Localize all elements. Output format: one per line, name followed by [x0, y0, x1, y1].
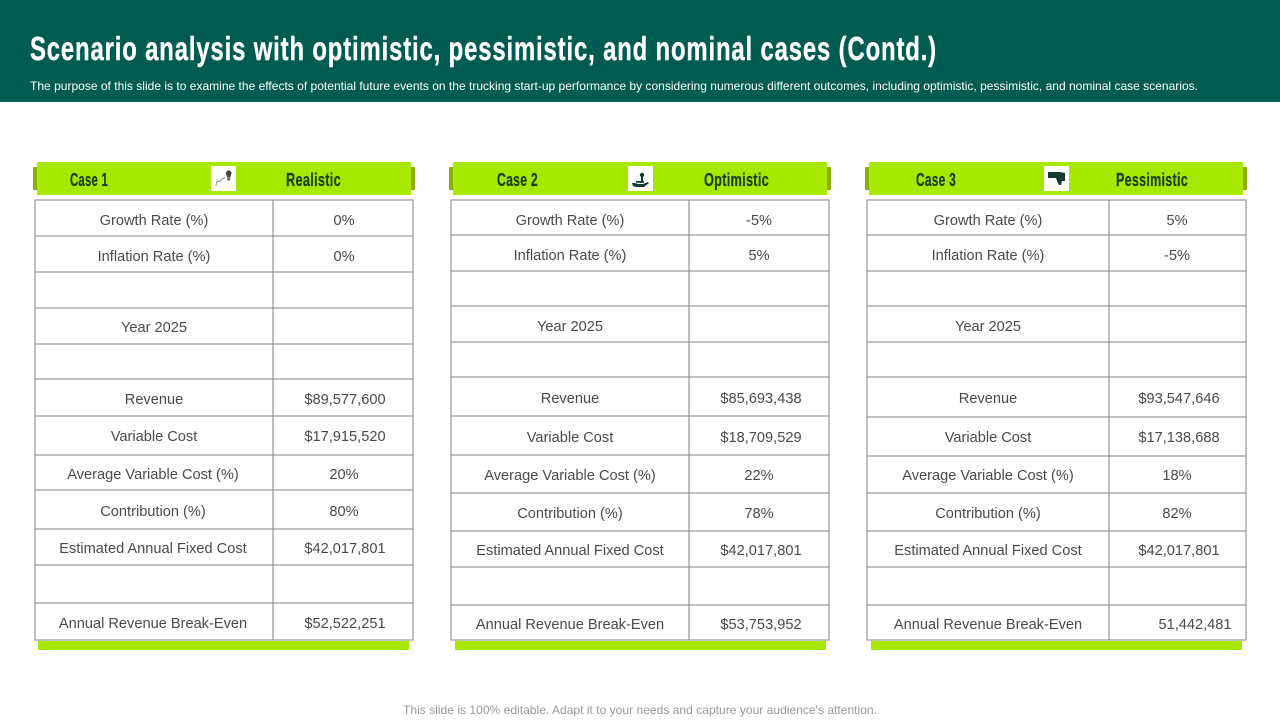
row: revenue: $89,577,600	[304, 392, 386, 408]
row: year: Year 2025	[121, 320, 187, 336]
bottom accent bar	[455, 641, 826, 650]
row: break-even	[894, 617, 1232, 633]
row: average variable cost: 18%	[1162, 468, 1192, 484]
row: revenue: Revenue	[959, 391, 1017, 407]
row: fixed cost	[894, 543, 1220, 559]
row: variable cost: $17,915,520	[304, 429, 386, 445]
row: fixed cost: $42,017,801	[1138, 543, 1220, 559]
row: contribution: 78%	[744, 506, 774, 522]
title: Scenario analysis with optimistic, pessimistic, and nominal cases (Contd.)	[30, 30, 937, 67]
row: contribution: 82%	[1162, 506, 1192, 522]
row: variable cost: Variable Cost	[945, 430, 1031, 446]
row: inflation rate	[98, 249, 355, 265]
case 2 heading bar: Optimistic	[704, 170, 769, 190]
row: revenue	[959, 391, 1220, 407]
row: contribution	[517, 506, 774, 522]
case 3 heading bar: Case 3	[916, 170, 956, 190]
header banner	[0, 0, 1280, 102]
row: year: Year 2025	[955, 319, 1021, 335]
row: break-even: Annual Revenue Break-Even	[894, 617, 1082, 633]
row: fixed cost: $42,017,801	[720, 543, 802, 559]
row: break-even: $52,522,251	[304, 616, 386, 632]
row: inflation rate: Inflation Rate (%)	[514, 248, 626, 264]
row: break-even: Annual Revenue Break-Even	[476, 617, 664, 633]
row: variable cost: $18,709,529	[720, 430, 802, 446]
row: growth rate: Growth Rate (%)	[934, 213, 1042, 229]
case 3 heading bar	[865, 162, 1247, 195]
row: variable cost	[527, 430, 802, 446]
row: variable cost	[111, 429, 386, 445]
case 3 heading bar: Pessimistic	[1116, 170, 1188, 190]
row: inflation rate: 5%	[748, 248, 770, 264]
row: average variable cost	[902, 468, 1192, 484]
icon: light bulb on rising line	[211, 166, 236, 191]
row: fixed cost: Estimated Annual Fixed Cost	[476, 543, 664, 559]
row: inflation rate: -5%	[1164, 248, 1190, 264]
row: growth rate: 0%	[333, 213, 355, 229]
row: revenue	[541, 391, 802, 407]
row: growth rate	[934, 213, 1188, 229]
row: revenue	[125, 392, 386, 408]
row: inflation rate	[932, 248, 1190, 264]
row: growth rate	[100, 213, 355, 229]
row: average variable cost: Average Variable Cost (%)	[902, 468, 1074, 484]
row: contribution: 80%	[329, 504, 359, 520]
case 1 heading bar: Realistic	[286, 170, 341, 190]
case 2 heading bar: Case 2	[497, 170, 538, 190]
row: inflation rate: 0%	[333, 249, 355, 265]
icon: thumbs down	[1044, 166, 1069, 191]
row: fixed cost	[476, 543, 802, 559]
row: contribution: Contribution (%)	[517, 506, 623, 522]
bottom accent bar	[38, 641, 409, 650]
row: fixed cost: Estimated Annual Fixed Cost	[59, 541, 247, 557]
panel: case 3 pessimistic	[865, 162, 1247, 650]
row: inflation rate	[514, 248, 770, 264]
row: revenue: Revenue	[125, 392, 183, 408]
subtitle: The purpose of this slide is to examine the effects of potential future events on the trucking start-up performance by considering numerous different outcomes, including optimistic, pessimistic, and nominal case scenarios.	[30, 79, 1198, 93]
row: break-even	[476, 617, 802, 633]
case 1 heading bar: Case 1	[70, 170, 108, 190]
icon: hand holding plant	[628, 166, 653, 191]
bottom accent bar	[871, 641, 1242, 650]
footer note: This slide is 100% editable. Adapt it to your needs and capture your audience's attention.	[403, 703, 877, 717]
row: fixed cost: $42,017,801	[304, 541, 386, 557]
row: growth rate: 5%	[1166, 213, 1188, 229]
table grid case 2	[451, 200, 829, 640]
row: average variable cost	[67, 467, 359, 483]
row: growth rate: Growth Rate (%)	[516, 213, 624, 229]
row: average variable cost	[484, 468, 774, 484]
row: revenue: $85,693,438	[720, 391, 802, 407]
row: contribution: Contribution (%)	[935, 506, 1041, 522]
row: break-even: 51,442,481	[1158, 617, 1232, 633]
row: break-even	[59, 616, 386, 632]
row: fixed cost	[59, 541, 386, 557]
row: contribution	[100, 504, 359, 520]
row: growth rate: Growth Rate (%)	[100, 213, 208, 229]
row: break-even: Annual Revenue Break-Even	[59, 616, 247, 632]
row: contribution	[935, 506, 1192, 522]
row: growth rate	[516, 213, 772, 229]
row: variable cost: Variable Cost	[527, 430, 613, 446]
row: average variable cost: Average Variable Cost (%)	[484, 468, 656, 484]
table grid case 3	[867, 200, 1246, 640]
row: growth rate: -5%	[746, 213, 772, 229]
case 1 heading bar	[33, 162, 415, 195]
row: average variable cost: 20%	[329, 467, 359, 483]
row: average variable cost: Average Variable Cost (%)	[67, 467, 239, 483]
table grid case 1	[35, 200, 413, 640]
row: inflation rate: Inflation Rate (%)	[932, 248, 1044, 264]
row: revenue: $93,547,646	[1138, 391, 1220, 407]
case 2 heading bar	[449, 162, 831, 195]
row: variable cost: $17,138,688	[1138, 430, 1220, 446]
row: average variable cost: 22%	[744, 468, 774, 484]
row: fixed cost: Estimated Annual Fixed Cost	[894, 543, 1082, 559]
row: inflation rate: Inflation Rate (%)	[98, 249, 210, 265]
row: revenue: Revenue	[541, 391, 599, 407]
row: year: Year 2025	[537, 319, 603, 335]
row: variable cost: Variable Cost	[111, 429, 197, 445]
row: break-even: $53,753,952	[720, 617, 802, 633]
panel: case 2 optimistic	[449, 162, 831, 650]
panel: case 1 realistic	[33, 162, 415, 650]
row: variable cost	[945, 430, 1220, 446]
row: contribution: Contribution (%)	[100, 504, 206, 520]
